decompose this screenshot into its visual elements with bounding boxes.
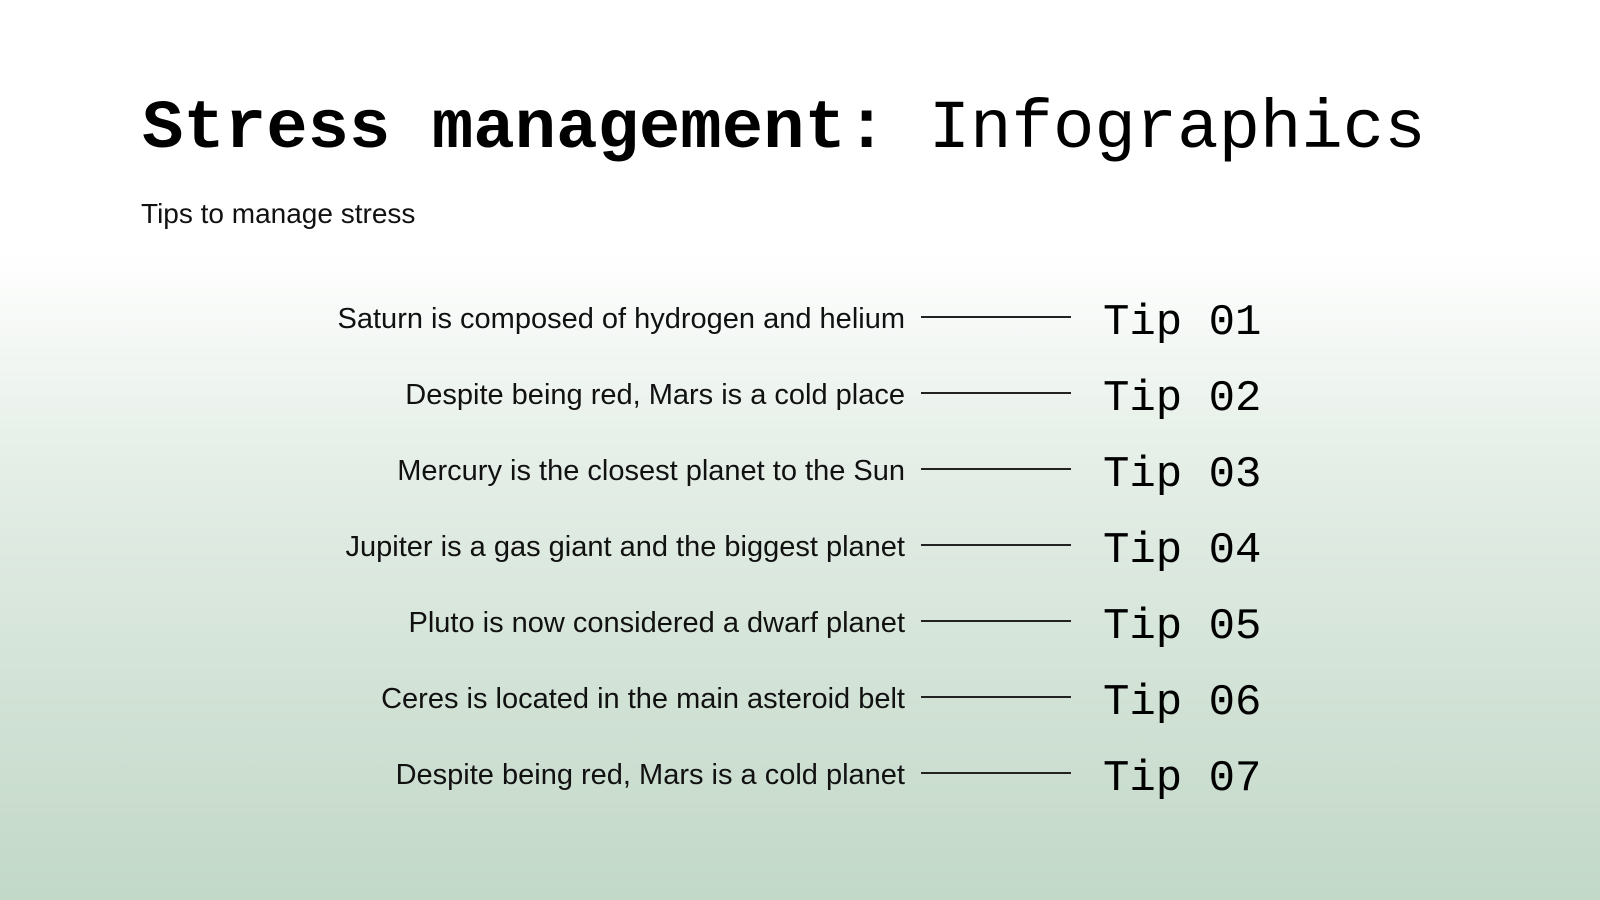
tip row 05: Tip 05 — [1103, 602, 1261, 652]
tip row 06: Ceres is located in the main asteroid belt — [381, 683, 905, 715]
tip row 05 — [408, 602, 1261, 652]
tip row 04: Jupiter is a gas giant and the biggest planet — [346, 531, 905, 563]
tip row 04 — [346, 526, 1261, 576]
tip row 02: Despite being red, Mars is a cold place — [405, 379, 905, 411]
tip row 07: Despite being red, Mars is a cold planet — [396, 759, 905, 791]
tip row 07 — [396, 754, 1261, 804]
tip row 01: Tip 01 — [1103, 298, 1261, 348]
tip row 05: Pluto is now considered a dwarf planet — [408, 607, 905, 639]
tip row 01 — [338, 298, 1261, 348]
tip row 02 — [405, 374, 1261, 424]
tip row 01: Saturn is composed of hydrogen and helium — [338, 303, 905, 335]
tip row 04: Tip 04 — [1103, 526, 1261, 576]
tip row 03: Tip 03 — [1103, 450, 1261, 500]
tip row 03: Mercury is the closest planet to the Sun — [397, 455, 905, 487]
tip row 06 — [381, 678, 1261, 728]
tip row 06: Tip 06 — [1103, 678, 1261, 728]
title: Stress management: Infographics — [142, 90, 1426, 168]
tip row 07: Tip 07 — [1103, 754, 1261, 804]
tip row 03 — [397, 450, 1261, 500]
tip row 02: Tip 02 — [1103, 374, 1261, 424]
subtitle: Tips to manage stress — [141, 198, 415, 229]
